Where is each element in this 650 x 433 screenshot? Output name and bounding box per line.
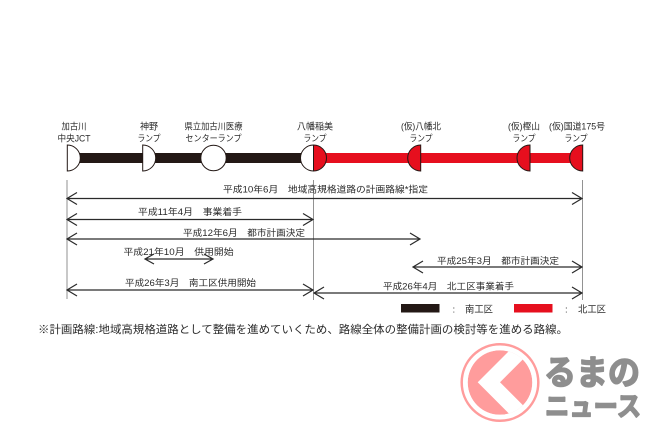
logo disc with chevron [468,350,532,415]
legend colon: south: : [452,304,455,316]
road diagram [67,145,583,171]
interchange: Kanno [143,145,156,171]
label: Kanno ramp: ランプ [138,134,160,144]
arrow: partial opening 2009 [145,254,213,264]
legend colon: north: : [565,304,568,316]
text: 1998: 平成10年6月 地域高規格道路の計画路線*指定 [223,184,428,194]
logo wordmark: るまの [544,354,640,392]
timeline arrows [67,192,582,299]
label: Route 175: (仮)国道175号 [549,120,605,132]
interchange: medical center [201,145,226,171]
label: Yahata Inami ramp: ランプ [304,134,326,144]
interchange: Yahata Inami [300,145,326,171]
southern section bar [72,153,314,163]
interchange: Kakogawa JCT [67,145,80,171]
legend swatch: north [514,304,552,312]
text: 2013: 平成25年3月 都市計画決定 [437,255,559,266]
legend text: north: 北工区 [578,304,606,316]
interchange: Kashiyama [517,145,530,171]
footnote: ※計画路線:地域高規格道路として整備を進めていくため、路線全体の整備計画の検討等を進める路線。 [38,322,568,336]
label: medical center: 県立加古川医療 [184,120,242,132]
label: Yahata Inami: 八幡稲美 [297,120,333,132]
interchange: Yahata Kita [408,145,421,171]
label: medical center ramp: センターランプ [186,134,242,144]
legend swatch: south [401,304,440,312]
interchange: Route 175 [570,145,583,171]
arrow: south opening 2014 [67,284,313,296]
label: Kakogawa JCT: 加古川 [62,120,86,132]
label: Kanno: 神野 [140,120,158,132]
label: Kashiyama ramp: ランプ [512,134,536,144]
label: Route 175 ramp: ランプ [564,134,588,144]
text: 1999: 平成11年4月 事業着手 [138,206,242,217]
logo: kuruma no news [462,342,641,422]
legend text: south: 南工区 [465,304,493,316]
arrow: project start 1999 [67,214,313,226]
logo sub wordmark: ニュース [545,392,641,422]
arrow: city plan 2013 [413,261,582,273]
ramp labels [58,120,605,144]
text: 2000: 平成12年6月 都市計画決定 [183,227,305,238]
guide lines [67,180,582,300]
label: Yahata Kita: (仮)八幡北 [401,120,441,132]
label: Kakogawa JCT second line: 中央JCT [58,132,91,144]
timeline labels [124,184,559,292]
legend [401,304,606,316]
northern section bar [314,153,576,163]
text: 2014 north: 平成26年4月 北工区事業着手 [383,280,514,292]
arrow: city plan 2000 [67,233,420,245]
label: Kashiyama: (仮)樫山 [508,120,540,132]
label: Yahata Kita ramp: ランプ [410,134,432,144]
text: 2009: 平成21年10月 供用開始 [124,246,234,257]
text: 2014 south: 平成26年3月 南工区供用開始 [125,277,256,288]
arrow: north start 2014 [314,287,582,299]
arrow: planned route 1998 [67,192,582,204]
logo ring [462,344,538,421]
